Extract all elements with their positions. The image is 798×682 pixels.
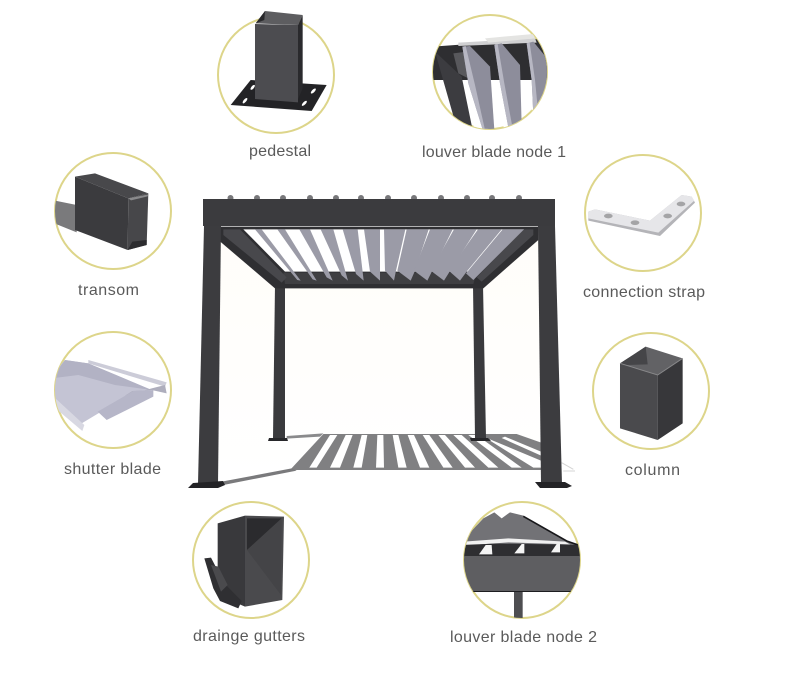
ground shadow xyxy=(222,433,575,485)
label: drainge gutters xyxy=(193,628,305,645)
part: pedestal xyxy=(218,11,334,160)
icon: louver blade node xyxy=(432,34,548,133)
pergola illustration xyxy=(188,195,575,488)
part: shutter blade xyxy=(52,332,171,478)
roof opening and louver blades xyxy=(218,227,538,288)
back columns xyxy=(268,285,491,441)
circle xyxy=(433,15,547,129)
label: louver blade node 1 xyxy=(422,144,566,161)
circle xyxy=(464,502,580,618)
icon: transom xyxy=(52,173,148,250)
circle xyxy=(193,502,309,618)
icon: pedestal xyxy=(231,11,327,111)
top beam xyxy=(203,199,555,226)
part: louver blade node 2 xyxy=(450,502,597,646)
part: column xyxy=(593,333,709,479)
label: louver blade node 2 xyxy=(450,629,597,646)
part: drainage gutters xyxy=(193,502,309,645)
circle xyxy=(55,153,171,269)
label: pedestal xyxy=(249,143,311,160)
icon: shutter blade xyxy=(52,360,167,431)
front left column xyxy=(188,226,225,488)
part: louver blade node 1 xyxy=(422,15,566,161)
icon: connection strap xyxy=(588,195,695,236)
interior background xyxy=(220,228,540,478)
label: transom xyxy=(78,282,139,299)
infographic xyxy=(54,11,710,644)
circle xyxy=(218,17,334,133)
part: transom xyxy=(52,153,171,299)
icon: louver blade node xyxy=(462,512,582,622)
icon: drainage gutter xyxy=(204,516,284,608)
part: connection strap xyxy=(583,155,705,301)
label: column xyxy=(625,462,680,479)
roof knobs xyxy=(228,195,522,201)
front right column xyxy=(535,226,572,488)
circle xyxy=(585,155,701,271)
circle xyxy=(55,332,171,448)
circle xyxy=(593,333,709,449)
label: connection strap xyxy=(583,284,705,301)
icon: column xyxy=(620,347,683,440)
label: shutter blade xyxy=(64,461,161,478)
